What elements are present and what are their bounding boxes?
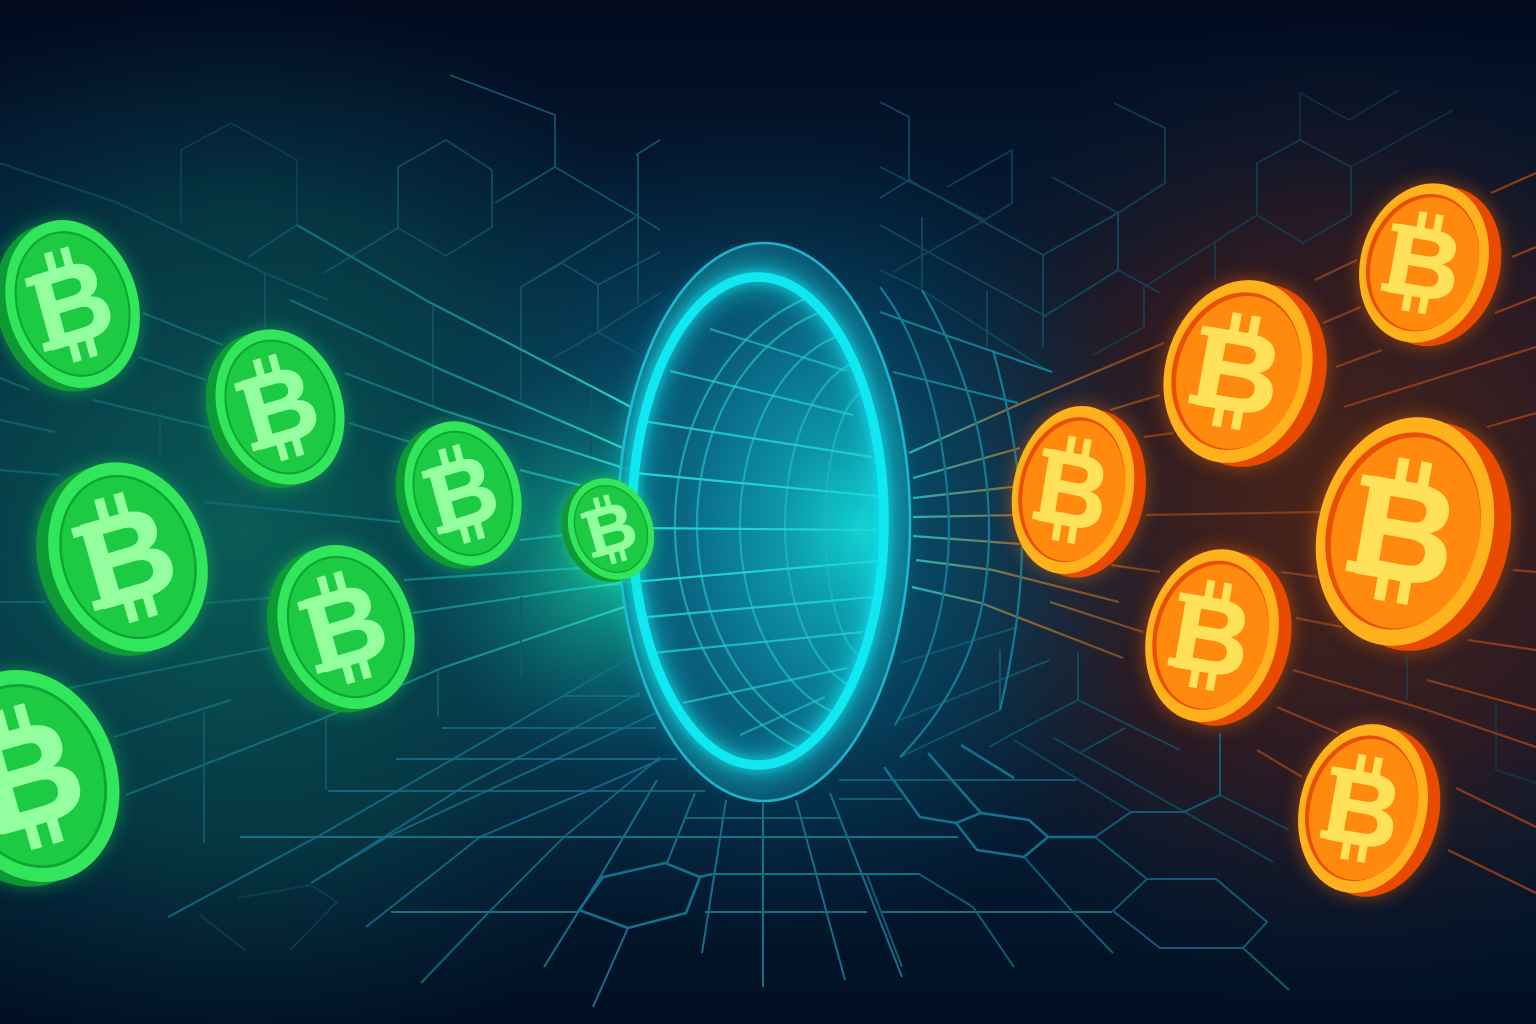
- coin: orange lower centre: B: [1164, 569, 1260, 702]
- floor lines: lower right network: [867, 627, 1536, 990]
- coin: green lower middle: B: [292, 557, 400, 696]
- coin: orange upper centre: B: [1184, 302, 1292, 441]
- coin: orange top right: [1341, 169, 1519, 360]
- portal: outer band: [618, 243, 910, 801]
- tunnel outer arcs: [880, 287, 1052, 757]
- coin: green large left: B: [66, 478, 191, 637]
- right perspective lines: [909, 173, 1536, 893]
- coin: green top left: [0, 199, 163, 412]
- portal: glowing cyan ring: [632, 277, 884, 765]
- coin: orange lower centre: [1127, 534, 1310, 741]
- coin: orange bottom right: B: [1316, 745, 1410, 874]
- coin: orange bottom right: [1280, 709, 1458, 912]
- coin: orange top right: B: [1377, 203, 1471, 324]
- coin: green near portal: B: [417, 432, 509, 554]
- floor grid: [168, 657, 1112, 1007]
- coin: green large left: [9, 439, 235, 679]
- faint hexagon network: upper right: [880, 90, 1453, 370]
- coin: orange upper centre: [1143, 264, 1348, 483]
- coin: green upper middle: [184, 310, 366, 507]
- coin: orange large right: [1291, 397, 1536, 671]
- coin: orange nearest portal: B: [1029, 427, 1117, 554]
- coin: green entering portal: B: [577, 487, 645, 572]
- floor hexagons: [579, 745, 1095, 928]
- coin: green lower middle: [244, 525, 438, 733]
- faint hexagon network: upper left: [160, 75, 660, 460]
- coin: green top left: B: [20, 233, 125, 374]
- coin: green bottom left: [0, 644, 149, 913]
- portal: tunnel interior: [638, 282, 880, 760]
- coin: green upper middle: B: [229, 342, 331, 472]
- left perspective lines: [0, 163, 631, 795]
- left lower vertical struts: [200, 597, 521, 950]
- coin: green entering portal: [547, 466, 669, 594]
- green coins: [0, 199, 669, 913]
- coin: orange large right: B: [1341, 445, 1469, 619]
- orange coins: [995, 169, 1536, 912]
- coin: green near portal: [376, 403, 541, 587]
- coin: orange nearest portal: [995, 391, 1163, 593]
